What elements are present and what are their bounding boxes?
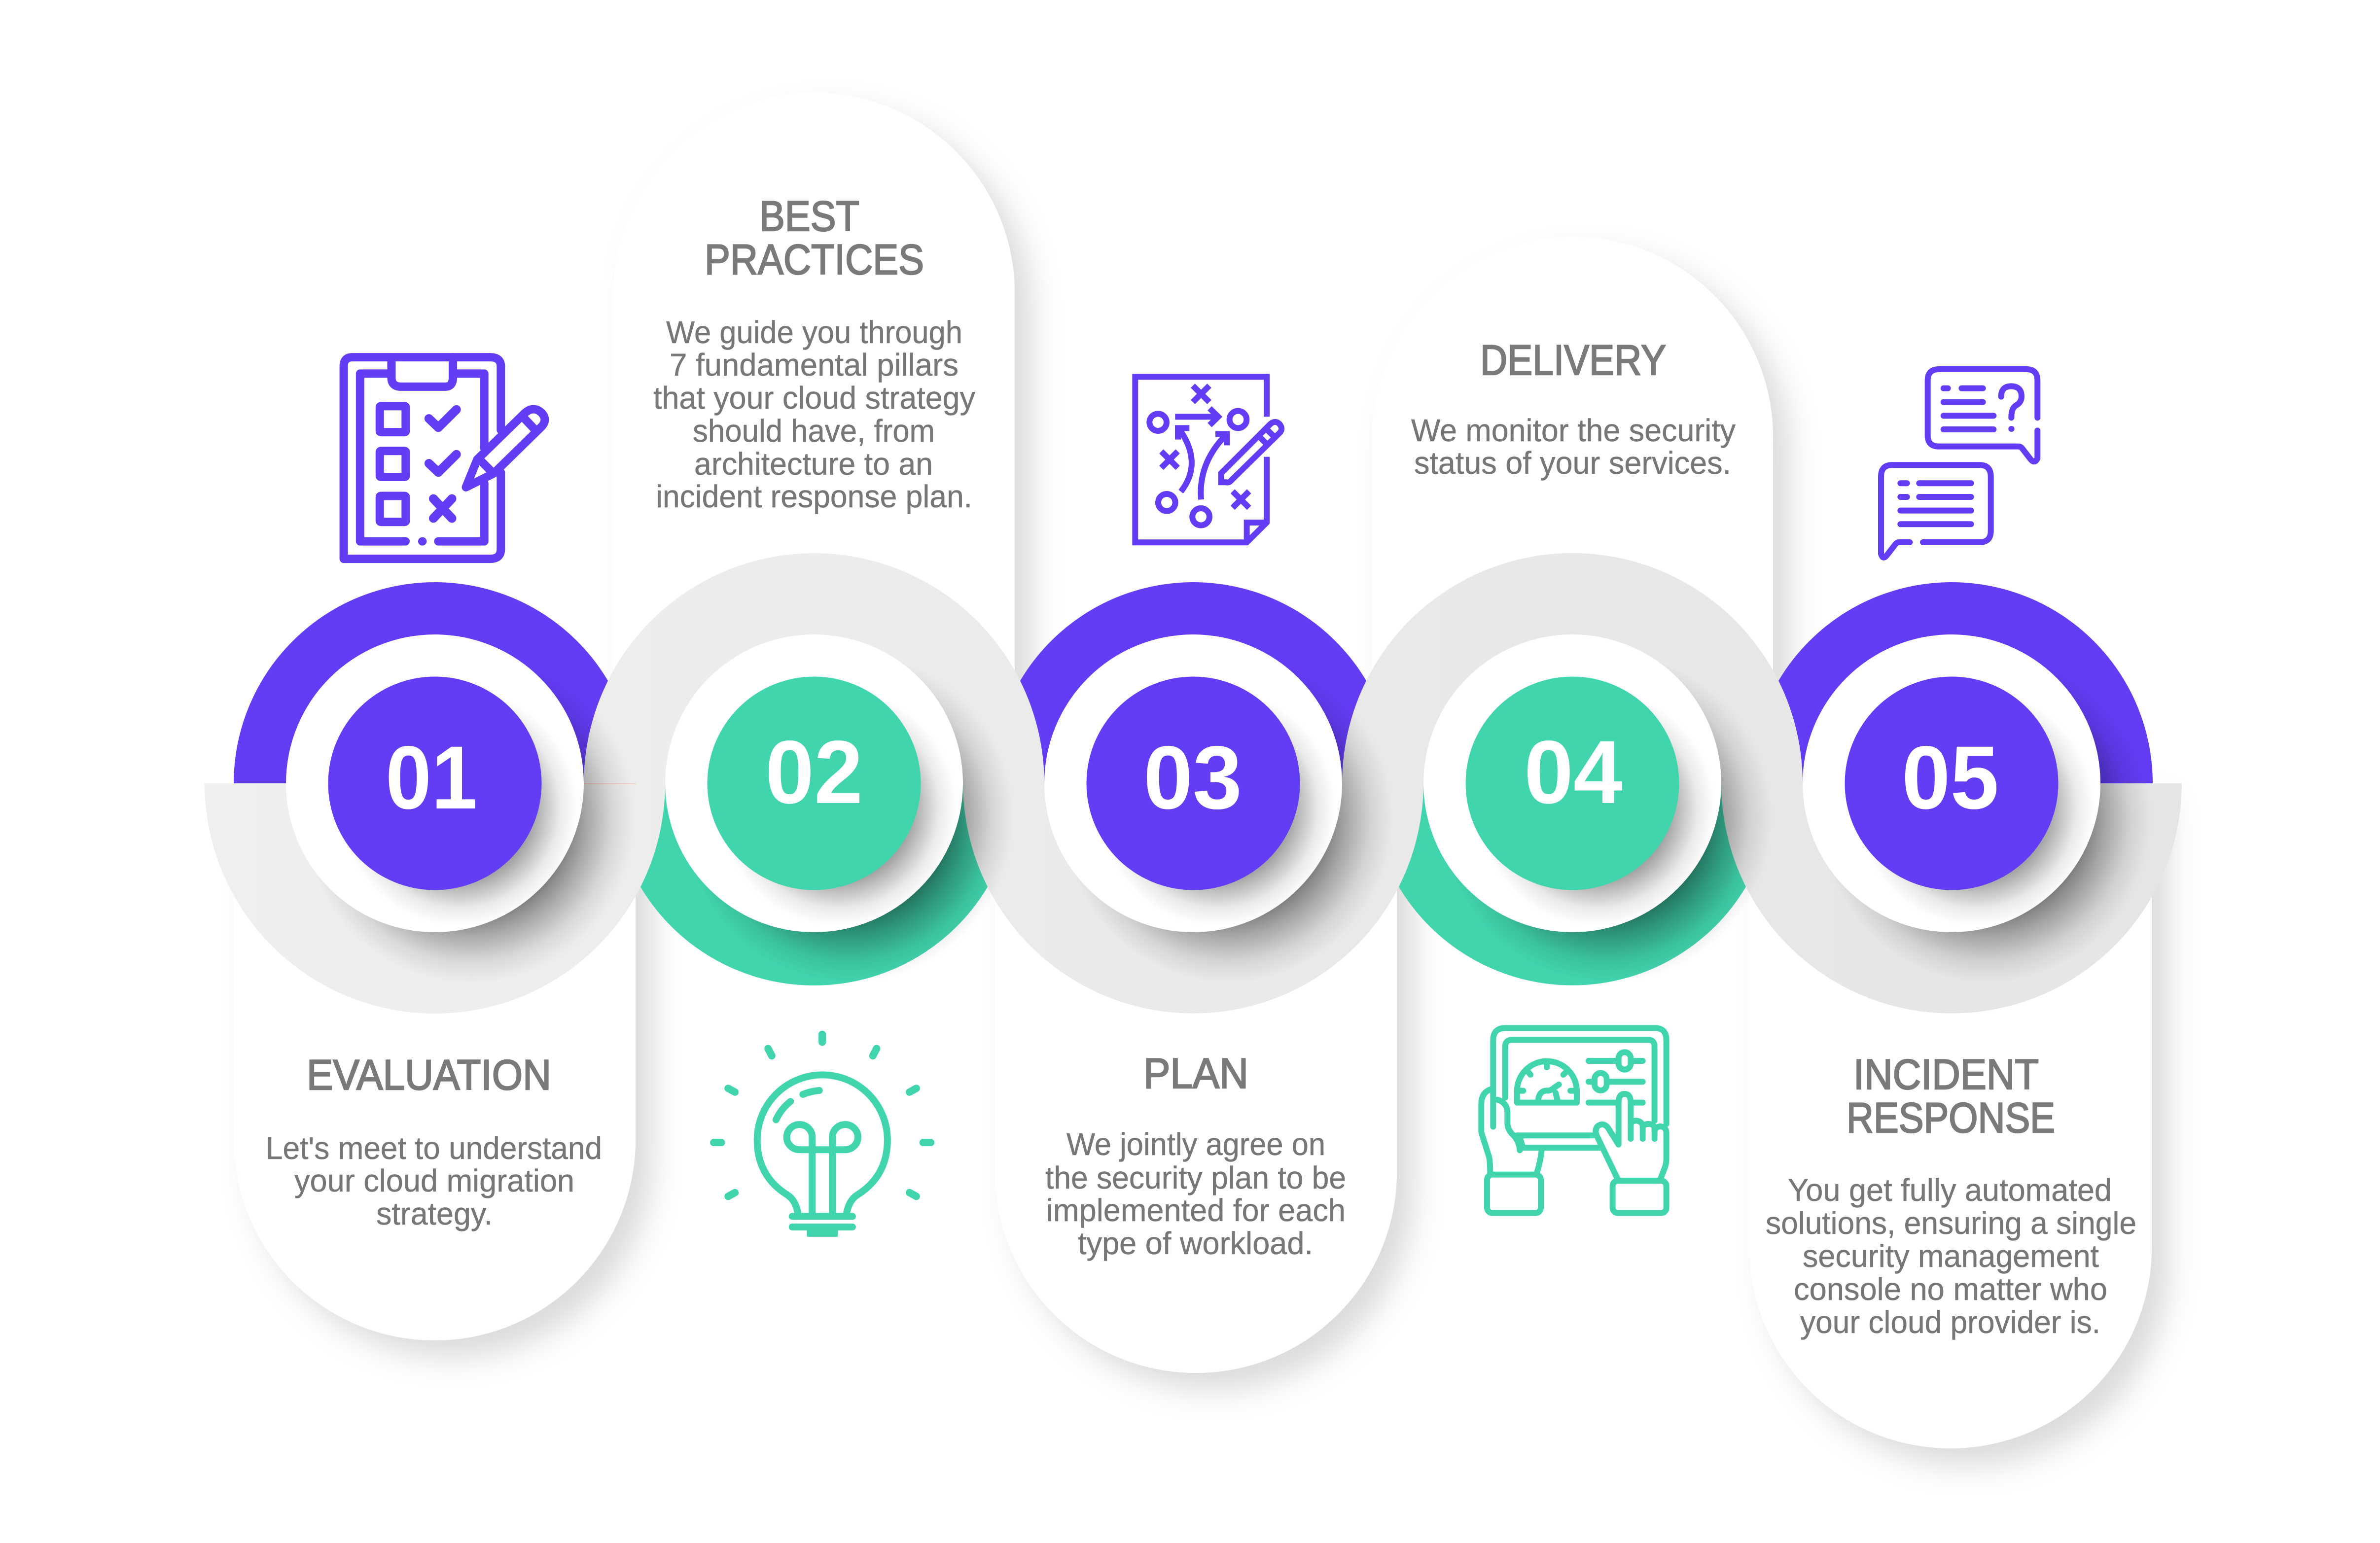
text: plan description: implemented for each (1046, 1192, 1346, 1228)
icon: hands on dashboard tablet (1481, 1028, 1667, 1213)
step 03 circle (1044, 634, 1393, 983)
icon: strategy play sheet (1135, 377, 1281, 542)
text: plan description: the security plan to be (1045, 1160, 1346, 1195)
step 04 circle (1423, 634, 1772, 983)
icon: speech bubbles with question mark (1881, 369, 2037, 558)
text: best practices description: 7 fundamental pillars (670, 347, 959, 383)
text: plan description: We jointly agree on (1066, 1126, 1325, 1162)
step 05 circle (1803, 634, 2151, 983)
purple half rings (234, 582, 2153, 783)
text: best practices description (653, 315, 975, 514)
thin seam line (584, 783, 636, 784)
text: best practices description: incident response plan. (656, 479, 972, 514)
panel: plan (995, 783, 1397, 1373)
number 05: 05 (1902, 727, 1999, 828)
text: incident response description: You get fully automated (1788, 1172, 2112, 1208)
icon: clipboard checklist with pencil (344, 357, 545, 559)
text: evaluation description (266, 1130, 602, 1231)
text: delivery description: status of your services. (1414, 445, 1731, 481)
text: plan description: type of workload. (1078, 1226, 1313, 1261)
text: evaluation description: your cloud migration (294, 1163, 574, 1198)
number 03: 03 (1143, 727, 1242, 828)
heading: evaluation: EVALUATION (307, 1052, 551, 1099)
text: incident response description (1766, 1172, 2136, 1340)
icon: light bulb (714, 1034, 931, 1237)
text: best practices description: that your cloud strategy (653, 380, 975, 416)
heading: best practices (705, 193, 924, 283)
panel: delivery (1372, 237, 1773, 783)
text: evaluation description: strategy. (376, 1196, 493, 1231)
panel: evaluation (234, 783, 636, 1340)
heading: delivery: DELIVERY (1480, 337, 1666, 384)
heading: incident response: RESPONSE (1847, 1094, 2055, 1142)
text: best practices description: should have, from (693, 413, 935, 449)
step 01 circle (286, 634, 635, 983)
teal half rings (612, 783, 1775, 985)
text: incident response description: your cloud provider is. (1800, 1304, 2100, 1340)
panel: incident response (1749, 783, 2152, 1448)
text: delivery description (1411, 413, 1736, 481)
number 01: 01 (386, 727, 477, 828)
heading: plan: PLAN (1143, 1050, 1248, 1097)
text: incident response description: solutions, ensuring a single (1766, 1205, 2136, 1241)
step 02 circle (665, 634, 1014, 983)
heading: incident response (1847, 1051, 2055, 1142)
number 04: 04 (1524, 722, 1623, 822)
text: best practices description: architecture to an (694, 446, 933, 482)
text: incident response description: security management (1803, 1238, 2099, 1274)
text: incident response description: console no matter who (1794, 1271, 2107, 1307)
number 02: 02 (765, 722, 863, 822)
text: delivery description: We monitor the security (1411, 413, 1736, 448)
heading: best practices: BEST (759, 193, 859, 240)
panel: best practices (613, 93, 1015, 783)
text: evaluation description: Let's meet to understand (266, 1130, 602, 1166)
grey wave band (205, 553, 2182, 1014)
text: plan description (1045, 1126, 1346, 1261)
heading: best practices: PRACTICES (705, 236, 924, 283)
text: best practices description: We guide you through (666, 315, 962, 350)
heading: incident response: INCIDENT (1853, 1051, 2039, 1098)
